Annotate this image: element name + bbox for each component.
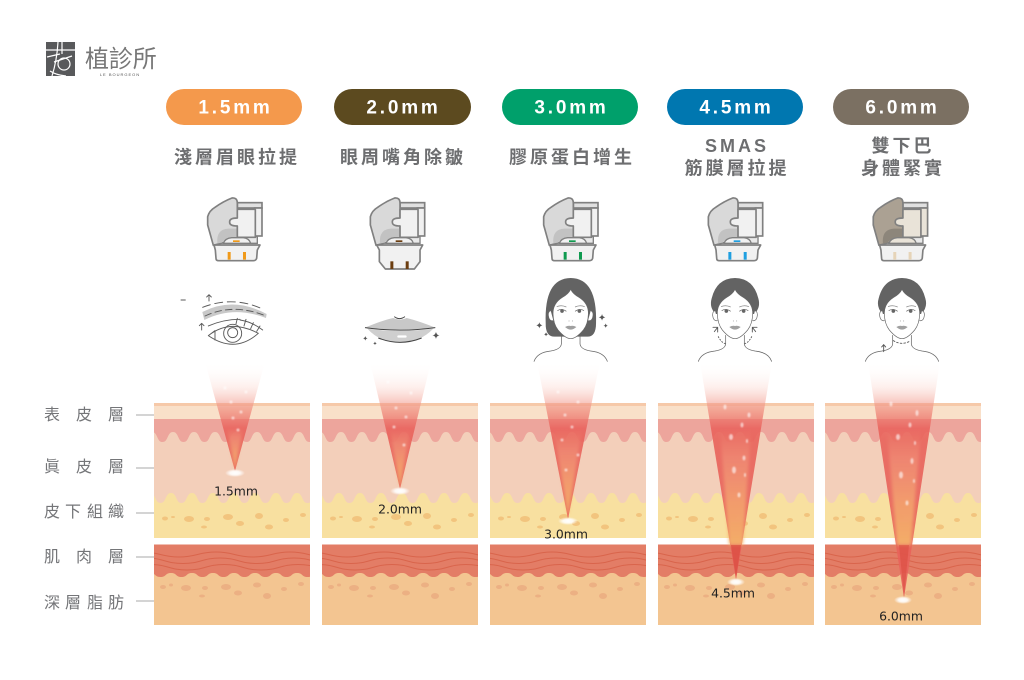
beam: 1.5mm <box>205 362 265 477</box>
layer label: epidermis: 層 <box>108 407 124 424</box>
depth pill: 1.5mm: 1.5mm <box>198 98 273 118</box>
layer label: dermis: 眞 <box>44 458 60 476</box>
layer label: deep fat: 肪 <box>108 594 124 612</box>
depth pill: 2.0mm <box>334 89 471 125</box>
depth pill: 3.0mm <box>502 89 638 125</box>
panel: skin layers 4.5mm <box>646 403 876 626</box>
layer label: deep fat: 脂 <box>87 594 103 612</box>
heading: 4.5mm treatment <box>684 136 790 178</box>
depth pill: 1.5mm <box>166 89 302 125</box>
layer label: muscle: 層 <box>108 549 124 566</box>
depth pill: 2.0mm: 2.0mm <box>366 98 441 118</box>
panel: skin layers 2.0mm <box>310 403 540 626</box>
depth value: 1.5mm: 1.5mm <box>214 484 258 498</box>
layer label: dermis <box>44 458 154 476</box>
layer label: deep fat <box>44 594 154 612</box>
heading: 6.0mm treatment <box>861 136 945 178</box>
icon: eye and brow lift <box>181 295 267 344</box>
depth value: 6.0mm: 6.0mm <box>879 608 923 624</box>
depth pill: 4.5mm <box>667 89 803 125</box>
heading: 2.0mm treatment: 眼周嘴角除皺 <box>340 146 466 168</box>
icon: face with bob hair <box>534 278 608 361</box>
icon: 4.5mm cartridge <box>708 198 763 261</box>
layer label: deep fat: 層 <box>65 595 81 612</box>
layer label: subcutaneous tissue: 織 <box>108 503 124 521</box>
layer label: epidermis: 表 <box>44 406 60 424</box>
panel: skin layers 1.5mm <box>142 403 372 626</box>
icon: 1.5mm cartridge <box>208 198 262 261</box>
layer label: muscle <box>44 548 154 566</box>
layer label: subcutaneous tissue <box>44 503 154 521</box>
heading: 4.5mm treatment: SMAS <box>705 136 769 156</box>
layer label: epidermis <box>44 406 154 424</box>
layer label: subcutaneous tissue: 下 <box>65 504 81 521</box>
layer label: epidermis: 皮 <box>76 406 92 424</box>
layer label: subcutaneous tissue: 皮 <box>44 503 60 521</box>
icon: face with lifted jaw <box>698 278 772 361</box>
panel: skin layers 6.0mm <box>813 403 1024 626</box>
heading: 3.0mm treatment: 膠原蛋白增生 <box>509 148 635 168</box>
heading: 6.0mm treatment: 雙下巴 <box>872 136 934 156</box>
layer label: subcutaneous tissue: 組 <box>87 503 103 521</box>
heading: 6.0mm treatment: 身體緊實 <box>861 158 945 178</box>
depth pill: 3.0mm: 3.0mm <box>534 98 609 118</box>
icon: lips <box>363 317 439 345</box>
depth value: 3.0mm: 3.0mm <box>544 526 588 542</box>
heading: 1.5mm treatment: 淺層眉眼拉提 <box>174 146 300 168</box>
beam: 4.5mm <box>700 362 772 586</box>
logo <box>46 42 157 77</box>
layer label: deep fat: 深 <box>44 594 60 612</box>
layer label: dermis: 層 <box>108 459 124 476</box>
icon: 3.0mm cartridge <box>544 198 598 261</box>
layer label: dermis: 皮 <box>76 458 92 476</box>
layer label: muscle: 肉 <box>76 548 92 566</box>
icon: 2.0mm cartridge <box>370 198 425 269</box>
beam: 3.0mm <box>537 362 600 525</box>
depth value: 2.0mm: 2.0mm <box>378 502 422 516</box>
layer label: muscle: 肌 <box>44 548 60 566</box>
logo: 植診所 <box>85 46 157 73</box>
heading: 4.5mm treatment: 筋膜層拉提 <box>684 158 790 178</box>
beam: 2.0mm <box>370 362 431 495</box>
icon: face with firm chin <box>865 278 939 361</box>
depth pill: 4.5mm: 4.5mm <box>699 98 774 118</box>
depth pill: 6.0mm: 6.0mm <box>865 98 940 118</box>
icon: 6.0mm cartridge <box>873 198 928 261</box>
panel: skin layers 3.0mm <box>478 403 708 626</box>
beam: 6.0mm <box>868 362 940 604</box>
depth pill: 6.0mm <box>833 89 969 125</box>
depth value: 4.5mm: 4.5mm <box>711 586 755 600</box>
logo: LE BOURGEON <box>100 72 140 77</box>
